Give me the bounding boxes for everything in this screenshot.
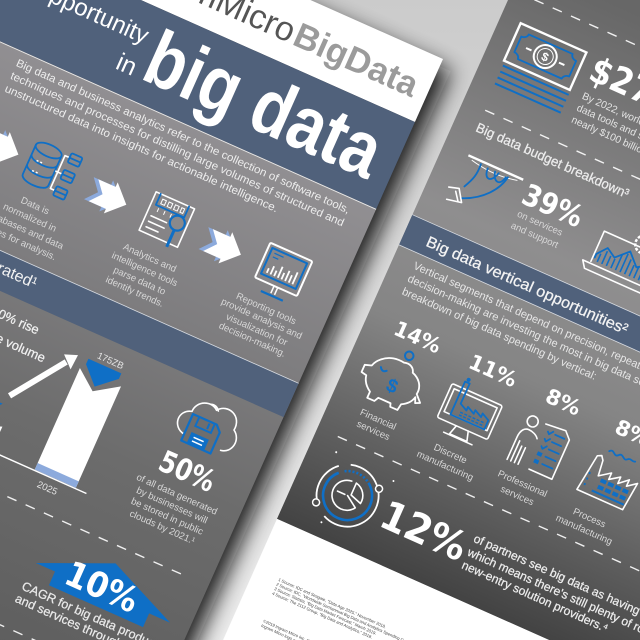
caption: professional services: services: [499, 484, 536, 508]
title: big data: [132, 13, 397, 195]
icon: money stack: $: [539, 49, 551, 65]
stat: 10%: 10%: [59, 554, 144, 621]
icon: piggy bank: $: [383, 375, 401, 399]
label: 2025: 2025: [35, 479, 59, 498]
heading: budget breakdown: Big data budget breakdown³: [474, 120, 632, 201]
caption: analytics tools: intelligence tools: [110, 250, 179, 289]
panel: left page: [0, 0, 443, 640]
caption: discrete manufacturing: manufacturing: [415, 449, 475, 484]
caption: professional services: Professional: [496, 468, 549, 500]
shadow of left page: [0, 0, 451, 640]
stat: discrete 11%: 11%: [465, 350, 521, 392]
section band: vertical opportunities: Big data vertical opportunities²: [423, 234, 630, 338]
caption: process manufacturing: manufacturing: [554, 513, 614, 548]
text: intro paragraph: unstructured data into insights for actionable intelligence.: [3, 83, 280, 215]
arrow 2: [82, 173, 133, 220]
panel: title band: [0, 0, 415, 209]
caption: reporting tools: visualization for: [224, 312, 290, 349]
title: [0, 0, 397, 195]
text: verticals intro: breakdown of big data spending by vertical:: [400, 286, 598, 383]
text: footnotes: 3 Source: Statista, "Big Data Market Forecast," March 2019.: [273, 586, 377, 636]
caption: reporting tools: decision-making.: [217, 321, 287, 360]
caption: process manufacturing: Process: [571, 506, 607, 530]
icon: money stack: [494, 23, 587, 113]
panel: white logo header: [0, 0, 443, 122]
icon: factory: [577, 444, 640, 511]
icon: monitor with factory: [433, 372, 507, 450]
arrow 1: [0, 122, 25, 170]
text: intro paragraph: techniques and processes for distilling large volumes of structured and: [8, 70, 346, 229]
chart: data growth bars: [0, 259, 142, 509]
caption: analytics tools: identify trends.: [104, 274, 165, 310]
caption: normalized data: Data is: [19, 195, 51, 217]
stat: 12%: 12%: [373, 492, 474, 571]
panel: page footer: [155, 519, 640, 640]
logo: BigData: [288, 16, 425, 105]
icon: blue up arrow: [30, 534, 183, 636]
caption: reporting tools: Reporting tools: [234, 291, 298, 327]
label: 175ZB: 175ZB: [95, 351, 125, 372]
stat: 50%: 50%: [153, 444, 220, 500]
icon: laptop with gear: [580, 216, 640, 301]
icon: piggy bank: [353, 337, 438, 418]
text: intro paragraph: Big data and business analytics refer to the collection of software tools,: [14, 57, 352, 216]
text: public clouds: of all data generated: [134, 472, 219, 518]
caption: reporting tools: provide analysis and: [219, 296, 304, 342]
caption: financial services: Financial: [358, 407, 398, 433]
stat: 39%: 39%: [516, 178, 588, 235]
text: services and support: on services: [515, 209, 564, 239]
arrow 3: [197, 223, 248, 270]
icon: person with checklist: [507, 413, 572, 479]
caption: analytics tools: Analytics and: [121, 242, 178, 275]
icon: database and cubes: [20, 138, 83, 200]
text: footnotes: 4 Source: The 2112 Group, "Big Data and Analytics," 2018.: [271, 591, 373, 640]
icon: cloud and floppy disk: [171, 392, 247, 461]
text: footnotes: 1 Source: IDC and Seagate, "Data Age 2025," November 2018.: [278, 577, 387, 629]
panel: grey body: [0, 0, 376, 640]
text: public clouds: by businesses will: [134, 485, 209, 526]
title: in: [112, 48, 141, 82]
caption: analytics tools: parse data to: [112, 265, 167, 298]
icon: pie chart ring: [305, 450, 396, 544]
text: public clouds: clouds by 2021.¹: [128, 508, 196, 547]
icon: hand with tray: [444, 153, 523, 224]
text: partners note: new-entry solution providers.⁴: [460, 558, 610, 635]
icon: reporting monitor: [251, 243, 312, 305]
text: services and support: and support: [509, 220, 560, 251]
caption: normalized data: normalized in: [1, 201, 58, 235]
stat: professional 8%: 8%: [542, 384, 584, 420]
caption: financial services: services: [355, 419, 392, 443]
icon: analytics document: [137, 192, 195, 251]
caption: discrete manufacturing: Discrete: [432, 442, 469, 466]
panel: right page: [155, 0, 640, 640]
text: public clouds: be stored in public: [129, 496, 205, 538]
logo: [113, 0, 425, 105]
stat: financial 14%: 14%: [390, 316, 445, 358]
